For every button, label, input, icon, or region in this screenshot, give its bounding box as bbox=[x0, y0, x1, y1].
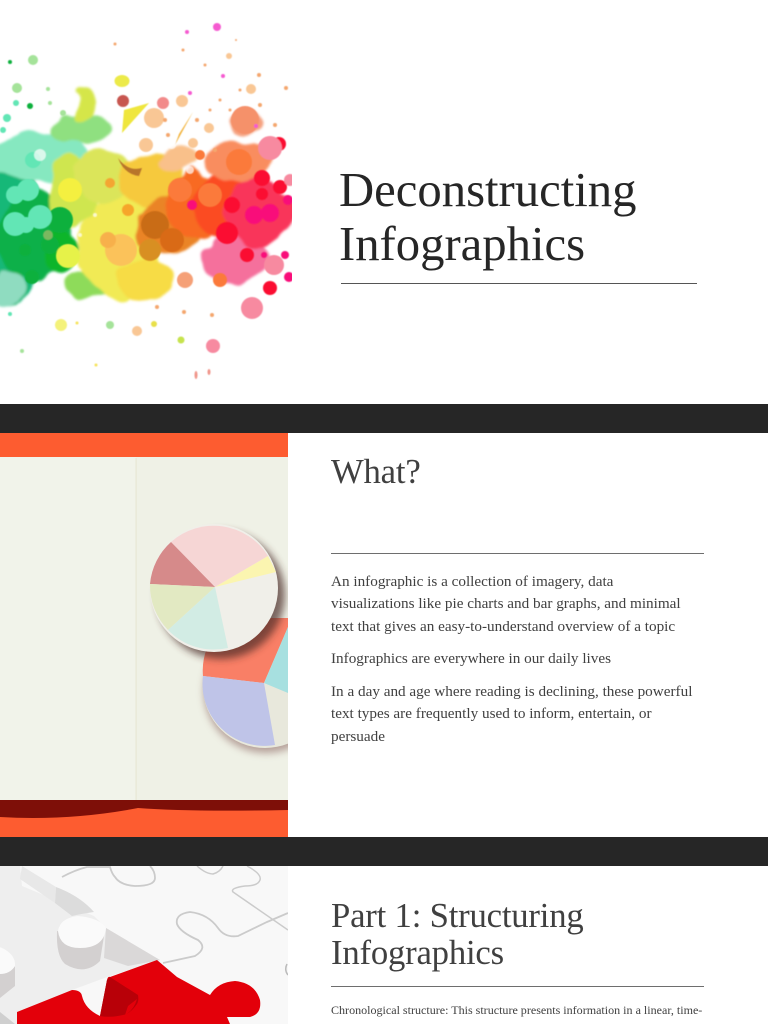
image: notebook with paper pie charts bbox=[0, 433, 288, 837]
title: Deconstructing bbox=[339, 163, 636, 217]
title bbox=[339, 163, 636, 271]
image: colourful paint splatter bbox=[0, 22, 292, 380]
image: jigsaw puzzle with red piece bbox=[0, 866, 288, 1024]
second pie chart bbox=[200, 618, 288, 758]
text block: what an infographic is: text that gives an easy-to-understand overview of a topic bbox=[331, 618, 675, 635]
heading: Part 1: Infographics bbox=[331, 933, 504, 972]
first pie chart bbox=[150, 524, 285, 659]
heading: Part 1 bbox=[331, 896, 584, 972]
left knob bbox=[0, 947, 15, 998]
text block: what an infographic is bbox=[331, 573, 692, 745]
text block: what an infographic is: visualizations like pie charts and bar graphs, and minimal bbox=[331, 595, 681, 612]
text block: chronological structure bbox=[331, 1003, 702, 1024]
dark band 1 bbox=[0, 404, 768, 433]
text block: what an infographic is: Infographics are everywhere in our daily lives bbox=[331, 650, 611, 667]
text block: what an infographic is: text types are frequently used to inform, entertain, or bbox=[331, 705, 652, 722]
text block: what an infographic is: In a day and age where reading is declining, these powerful bbox=[331, 683, 692, 700]
title: Infographics bbox=[339, 217, 585, 271]
text block: what an infographic is: An infographic is a collection of imagery, data bbox=[331, 573, 613, 590]
heading: Part 1: Part 1: Structuring bbox=[331, 896, 583, 935]
slot wall bbox=[20, 866, 56, 903]
text block: chronological structure: Chronological structure: This structure presents information in a linear, time- bbox=[331, 1003, 702, 1017]
knob top bbox=[58, 916, 106, 948]
text block: what an infographic is: persuade bbox=[331, 728, 385, 745]
puzzle seams bbox=[62, 866, 155, 886]
floor of the empty slot bbox=[0, 866, 160, 1024]
red piece bbox=[17, 960, 260, 1024]
dark band 2 bbox=[0, 837, 768, 866]
heading: What?: What? bbox=[331, 452, 421, 491]
